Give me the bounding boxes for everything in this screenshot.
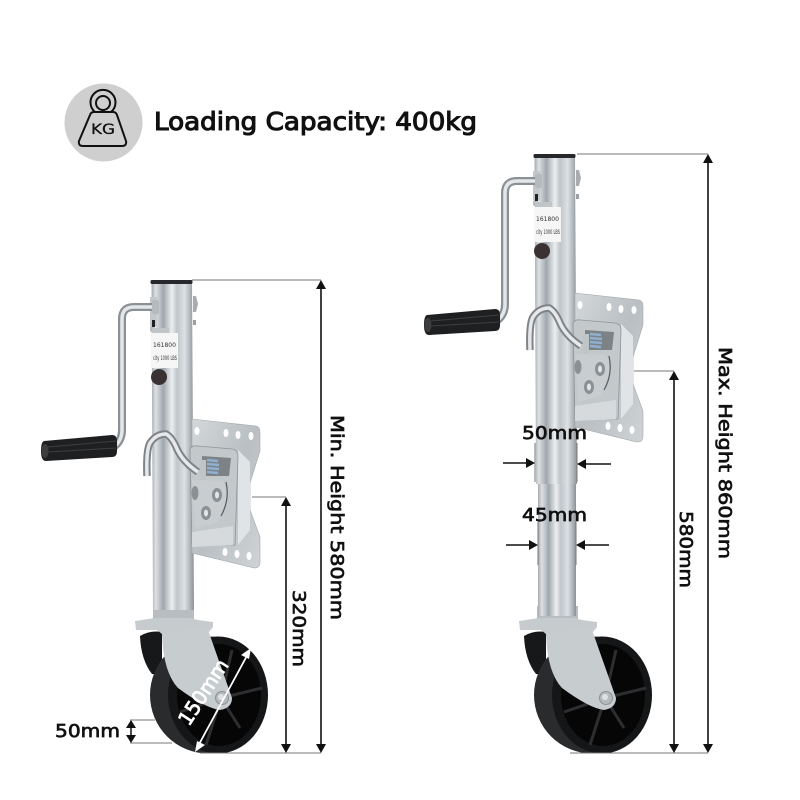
dimension: outer tube 50mm: 50mm [522,424,587,444]
sticker: city 1000 LBS [153,354,177,362]
sticker: 161800 [153,342,176,349]
dimension: wheel diameter 150mm: 150mm [173,655,233,730]
jack: retracted (left) [41,280,268,754]
sticker: city 1000 LBS [536,228,560,236]
dimension: min height: Min. Height 580mm [326,415,346,620]
sticker [151,333,178,368]
dimension: inner tube 45mm [506,506,609,565]
badge [534,243,550,259]
dimension: 580mm: 580mm [675,511,695,588]
dimension: max height [570,154,734,753]
dimension: inner tube 45mm: 45mm [522,506,587,526]
icon: weight KG [64,84,142,162]
dimension: min height [192,280,346,753]
dimension: 320mm: 320mm [288,590,308,667]
jack: extended (right) [424,154,652,754]
dimension: wheel width 50mm [55,720,172,743]
sticker [534,207,561,242]
badge [151,369,167,385]
dimension: max height: Max. Height 860mm [714,347,734,559]
sticker: 161800 [536,216,559,223]
heading: loading capacity: Loading Capacity: 400kg [154,107,477,136]
dimension: 320mm [252,497,308,753]
dimension: outer tube 50mm [503,424,611,482]
dimension: wheel width 50mm: 50mm [55,722,120,742]
icon: weight KG: KG [91,122,115,138]
dimension: wheel diameter 150mm [173,648,251,752]
dimension: 580mm [634,371,695,753]
